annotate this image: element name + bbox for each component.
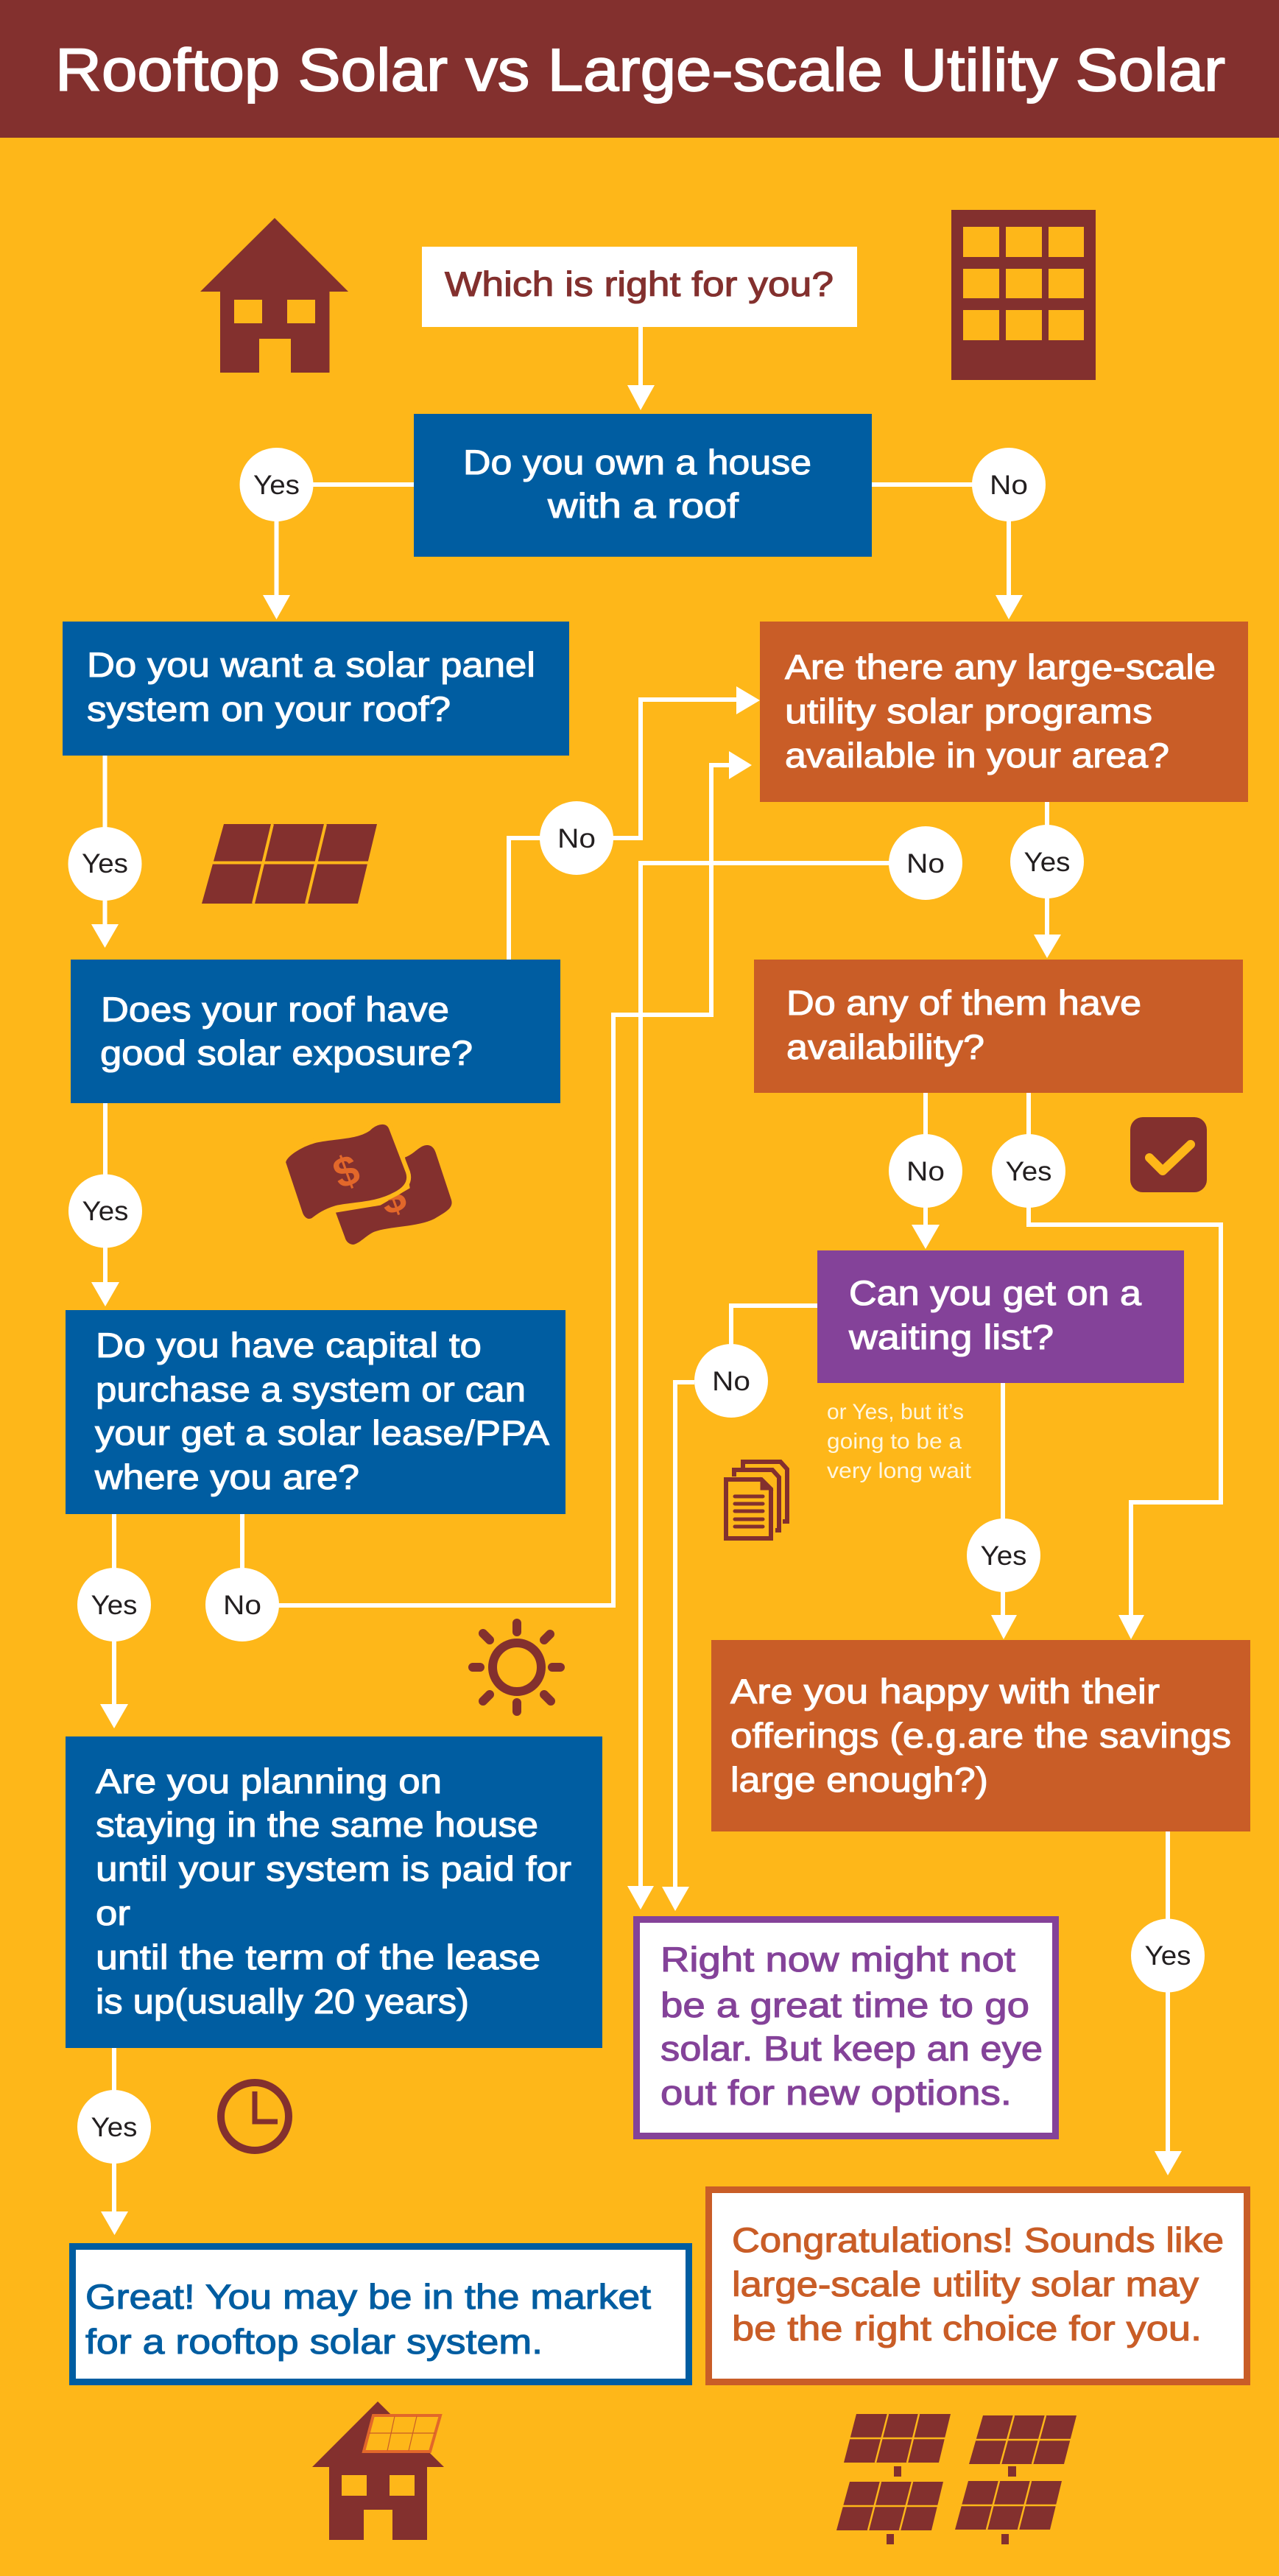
result: not a great time: solar. But keep an eye — [660, 2029, 1043, 2068]
box: capital or lease — [66, 1310, 565, 1514]
label: yes, staying: Yes — [91, 2112, 137, 2142]
label: no, programs: No — [906, 848, 945, 879]
result: not a great time — [636, 1919, 1056, 2136]
box: capital or lease: purchase a system or can — [96, 1370, 526, 1409]
box: happy with offerings: large enough?) — [730, 1760, 988, 1799]
icon: solar panel — [202, 824, 377, 904]
icon: money bills: $ — [327, 1145, 366, 1198]
label: no, waiting list — [694, 1344, 768, 1418]
box: staying in the same house: until the term of the lease — [96, 1938, 540, 1977]
box: utility programs available: Are there any large-scale — [785, 647, 1216, 686]
result: rooftop solar market: Great! You may be in the market — [85, 2277, 651, 2316]
box: want a solar panel: Do you want a solar panel — [87, 645, 535, 684]
label: yes, happy — [1131, 1919, 1205, 1993]
label: yes, own a house: Yes — [253, 470, 300, 500]
text: waiting list note: going to be a — [827, 1429, 962, 1454]
result: congratulations — [708, 2190, 1247, 2382]
icon: money bills — [283, 1122, 452, 1245]
result: not a great time: be a great time to go — [660, 1985, 1029, 2024]
label: no, availability: No — [906, 1156, 945, 1186]
icon: utility solar panel array — [836, 2414, 1077, 2544]
label: yes, exposure — [68, 1174, 142, 1247]
label: yes, waiting list: Yes — [981, 1541, 1026, 1571]
label: yes, staying — [77, 2090, 151, 2164]
box: utility programs available: utility solar programs — [785, 691, 1152, 731]
arrow: availability yes — [1029, 1093, 1221, 1639]
arrow: own a house yes — [263, 485, 414, 619]
label: no, exposure — [540, 801, 613, 875]
result: not a great time: Right now might not — [660, 1940, 1015, 1979]
label: no, own a house: No — [990, 470, 1028, 500]
box: staying in the same house: Are you planning on — [96, 1762, 442, 1801]
title banner — [0, 0, 1279, 138]
box: which is right for you: Which is right for you? — [445, 264, 834, 303]
box: good solar exposure: Does your roof have — [101, 990, 449, 1029]
result: rooftop solar market — [72, 2246, 689, 2382]
icon: house — [200, 218, 348, 373]
box: staying in the same house: staying in the same house — [96, 1805, 538, 1844]
label: yes, happy: Yes — [1144, 1940, 1191, 1971]
label: yes, programs: Yes — [1023, 847, 1071, 877]
arrow: capital no to utility programs — [242, 751, 752, 1605]
arrow: own a house no — [872, 485, 1023, 619]
box: availability — [754, 960, 1243, 1093]
label: no, exposure: No — [557, 823, 596, 854]
box: capital or lease: your get a solar lease/PPA — [95, 1413, 550, 1452]
box: utility programs available — [760, 622, 1248, 802]
box: waiting list: waiting list? — [848, 1317, 1054, 1356]
label: yes, solar panel: Yes — [82, 848, 128, 879]
box: utility programs available: available in your area? — [785, 736, 1169, 775]
box: waiting list: Can you get on a — [849, 1273, 1142, 1312]
arrow: availability no — [912, 1093, 940, 1249]
text: waiting list note — [827, 1400, 972, 1483]
arrow: solar panel yes — [91, 756, 119, 948]
arrow: exposure yes — [91, 1103, 119, 1306]
box: want a solar panel: system on your roof? — [87, 689, 451, 728]
label: yes, availability — [992, 1134, 1065, 1208]
label: no, waiting list: No — [712, 1366, 750, 1396]
label: yes, programs — [1010, 825, 1084, 898]
icon: office building — [951, 210, 1096, 380]
label: no, availability — [889, 1134, 962, 1208]
box: availability: availability? — [786, 1027, 984, 1066]
box: waiting list — [817, 1250, 1184, 1383]
box: staying in the same house: until your system is paid for — [96, 1849, 571, 1888]
box: do you own a house: Do you own a house — [463, 443, 811, 482]
box: good solar exposure — [71, 960, 560, 1103]
arrow: happy yes — [1155, 1831, 1182, 2175]
icon: checkmark — [1130, 1117, 1207, 1192]
icon: documents — [726, 1462, 787, 1538]
box: capital or lease: Do you have capital to — [96, 1326, 482, 1365]
result: congratulations: Congratulations! Sounds like — [732, 2220, 1224, 2259]
label: no, programs — [889, 826, 962, 900]
box: availability: Do any of them have — [786, 983, 1141, 1022]
label: yes, availability: Yes — [1006, 1156, 1051, 1186]
icon: money bills: $ — [373, 1172, 412, 1225]
arrow: programs yes — [1034, 802, 1061, 958]
box: staying in the same house: is up(usually 20 years) — [96, 1982, 469, 2021]
icon: clock — [221, 2083, 289, 2150]
box: staying in the same house — [66, 1736, 602, 2048]
box: happy with offerings: offerings (e.g.are the savings — [730, 1716, 1231, 1755]
arrow: exposure no to utility programs — [509, 686, 760, 960]
title banner: Rooftop Solar vs Large-scale Utility Solar — [55, 37, 1225, 104]
text: waiting list note: or Yes, but it’s — [827, 1400, 964, 1424]
box: which is right for you — [422, 247, 857, 327]
box: good solar exposure: good solar exposure? — [100, 1033, 473, 1072]
arrow: programs no to not a great time — [627, 863, 926, 1910]
box: staying in the same house: or — [96, 1893, 130, 1932]
label: yes, capital — [77, 1568, 151, 1641]
label: no, own a house — [972, 448, 1046, 521]
label: yes, solar panel — [68, 827, 141, 901]
result: congratulations: large-scale utility solar may — [732, 2264, 1199, 2304]
label: no, capital — [205, 1568, 279, 1641]
arrow: staying yes — [101, 2048, 128, 2235]
box: do you own a house: with a roof — [547, 486, 739, 525]
label: yes, waiting list — [967, 1518, 1040, 1592]
label: yes, exposure: Yes — [82, 1196, 128, 1226]
arrow: start to own a house — [627, 327, 655, 410]
arrow: capital yes — [100, 1514, 128, 1728]
box: happy with offerings: Are you happy with their — [730, 1672, 1160, 1711]
label: yes, capital: Yes — [91, 1590, 137, 1620]
box: capital or lease: where you are? — [94, 1457, 359, 1496]
box: happy with offerings — [711, 1640, 1250, 1831]
icon: house with rooftop solar — [312, 2401, 444, 2540]
result: congratulations: be the right choice for you. — [732, 2309, 1202, 2348]
label: yes, own a house — [240, 448, 314, 521]
icon: sun — [473, 1623, 560, 1711]
result: not a great time: out for new options. — [660, 2073, 1012, 2112]
arrow: waiting list no — [662, 1306, 817, 1911]
text: waiting list note: very long wait — [827, 1459, 972, 1483]
result: rooftop solar market: for a rooftop solar system. — [85, 2322, 543, 2361]
box: do you own a house — [414, 414, 872, 557]
arrow: waiting list yes — [991, 1383, 1017, 1639]
box: want a solar panel — [63, 622, 569, 756]
label: no, capital: No — [223, 1590, 261, 1620]
